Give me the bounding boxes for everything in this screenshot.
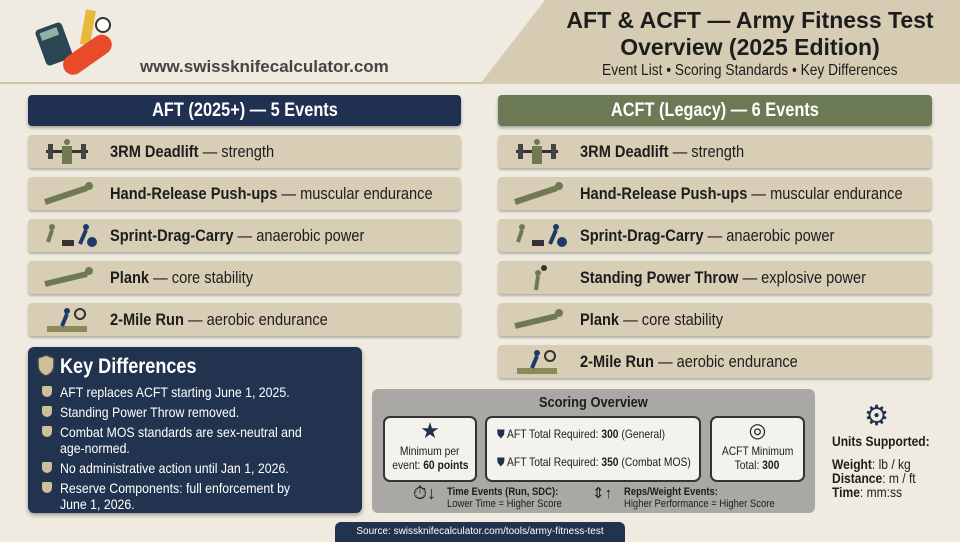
- panel: key differences: [28, 347, 362, 513]
- icon: gear: ⚙: [864, 400, 889, 431]
- event: sprint-drag-carry: [498, 219, 932, 252]
- event: sprint-drag-carry: [28, 219, 461, 252]
- ACFT events: [497, 135, 933, 381]
- key differences list: age-normed.: [60, 440, 130, 456]
- title: Overview (2025 Edition): [620, 34, 880, 60]
- box: ACFT minimum: Total: 300: [735, 458, 780, 472]
- scoring heading: Scoring Overview: [539, 394, 648, 411]
- legend: time events: Lower Time = Higher Score: [447, 498, 562, 510]
- box: minimum per event: event: 60 points: [392, 458, 468, 472]
- event: deadlift: [28, 135, 461, 168]
- legend: reps/weight events: [592, 485, 775, 510]
- key differences list: No administrative action until Jan 1, 2026.: [60, 460, 289, 476]
- event: sprint-drag-carry: Sprint-Drag-Carry — anaerobic power: [580, 226, 834, 245]
- ACFT heading: ACFT (Legacy) — 6 Events: [611, 100, 819, 121]
- box: minimum per event: Minimum per: [400, 444, 460, 458]
- box: minimum per event: ★: [420, 418, 440, 443]
- ACFT heading: [498, 95, 932, 126]
- AFT events: [27, 135, 462, 339]
- legend: time events: ⏱↓: [413, 483, 436, 503]
- units supported: Units Supported:: [832, 433, 930, 449]
- legend: time events: Time Events (Run, SDC):: [447, 486, 558, 498]
- event: push-ups: [498, 177, 932, 210]
- key differences list: Reserve Components: full enforcement by: [60, 480, 290, 496]
- event: plank: [28, 261, 461, 294]
- source footer: [335, 522, 625, 542]
- AFT heading: AFT (2025+) — 5 Events: [152, 100, 337, 121]
- units supported: [832, 400, 930, 500]
- key differences list: Combat MOS standards are sex-neutral and: [60, 424, 302, 440]
- title: AFT & ACFT — Army Fitness Test: [566, 7, 934, 33]
- key differences list: [42, 384, 302, 512]
- event: plank: Plank — core stability: [110, 268, 253, 287]
- event: 2-mile run: 2-Mile Run — aerobic endurance: [110, 310, 328, 329]
- legend: time events: [413, 483, 562, 510]
- logo icon: [35, 9, 112, 75]
- event: push-ups: Hand-Release Push-ups — muscular endurance: [580, 184, 903, 203]
- box: AFT totals: ⛊ AFT Total Required: 300 (General): [497, 427, 665, 441]
- event: standing power throw: Standing Power Throw — explosive power: [580, 268, 866, 287]
- key differences list: Standing Power Throw removed.: [60, 404, 239, 420]
- box: AFT totals: [485, 416, 701, 482]
- box: ACFT minimum: ACFT Minimum: [722, 444, 793, 458]
- event: push-ups: [28, 177, 461, 210]
- panel: scoring overview: [372, 389, 815, 513]
- key differences heading: Key Differences: [60, 355, 197, 378]
- legend: reps/weight events: Reps/Weight Events:: [624, 486, 718, 498]
- subtitle: Event List • Scoring Standards • Key Differences: [602, 62, 898, 79]
- event: deadlift: 3RM Deadlift — strength: [580, 142, 744, 161]
- event: sprint-drag-carry: Sprint-Drag-Carry — anaerobic power: [110, 226, 364, 245]
- event: deadlift: [498, 135, 932, 168]
- key differences list: AFT replaces ACFT starting June 1, 2025.: [60, 384, 290, 400]
- units supported: Time: mm:ss: [832, 484, 902, 500]
- box: AFT totals: ⛊ AFT Total Required: 350 (Combat MOS): [497, 455, 691, 469]
- units supported: Weight: lb / kg: [832, 456, 911, 472]
- event: plank: Plank — core stability: [580, 310, 723, 329]
- legend: reps/weight events: ⇕↑: [592, 485, 612, 502]
- event: deadlift: 3RM Deadlift — strength: [110, 142, 274, 161]
- legend: reps/weight events: Higher Performance = Higher Score: [624, 498, 775, 510]
- event: push-ups: Hand-Release Push-ups — muscular endurance: [110, 184, 433, 203]
- event: 2-mile run: [498, 345, 932, 378]
- units supported: Distance: m / ft: [832, 470, 916, 486]
- title panel: [480, 0, 960, 84]
- header band: [0, 0, 960, 84]
- event: plank: [498, 303, 932, 336]
- website url: www.swissknifecalculator.com: [140, 57, 389, 76]
- key differences list: June 1, 2026.: [60, 496, 135, 512]
- box: ACFT minimum: ◎: [749, 420, 766, 442]
- event: 2-mile run: [28, 303, 461, 336]
- event: standing power throw: [498, 261, 932, 294]
- box: minimum per event: [383, 416, 477, 482]
- title: [566, 7, 934, 60]
- event: 2-mile run: 2-Mile Run — aerobic endurance: [580, 352, 798, 371]
- AFT heading: [28, 95, 461, 126]
- source footer: Source: swissknifecalculator.com/tools/army-fitness-test: [356, 526, 604, 537]
- box: ACFT minimum: [710, 416, 805, 482]
